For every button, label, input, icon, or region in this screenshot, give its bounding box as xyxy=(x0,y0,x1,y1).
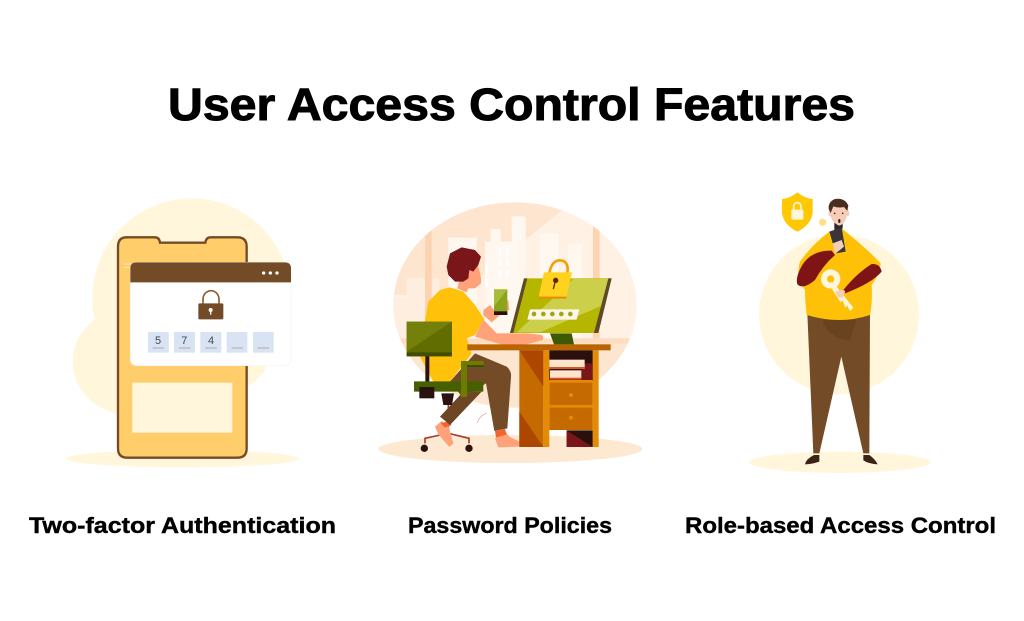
label: password policies: Password Policies xyxy=(408,513,612,538)
panel: role-based access control illustration xyxy=(749,192,931,473)
city skyline xyxy=(448,216,582,342)
desk xyxy=(467,344,611,447)
person: forearm and phone xyxy=(483,289,509,322)
monitor xyxy=(510,278,612,344)
person: neck and head xyxy=(828,199,849,231)
person: arm xyxy=(475,319,543,345)
ground shadow xyxy=(378,435,642,463)
person: shoes xyxy=(805,455,878,464)
authentication window xyxy=(130,262,291,366)
code boxes: 7 xyxy=(181,335,187,347)
label: two-factor authentication: Two-factor Authentication xyxy=(29,513,336,538)
person: right sleeve xyxy=(843,264,882,293)
window dots xyxy=(262,271,279,275)
background blob xyxy=(73,198,291,415)
books xyxy=(549,360,585,380)
thought bubble xyxy=(819,219,826,226)
window frames xyxy=(425,225,600,338)
ground shadow xyxy=(749,452,931,473)
person: legs xyxy=(807,313,870,453)
key icon xyxy=(821,269,853,311)
person: left sleeve xyxy=(797,251,835,286)
shield icon xyxy=(782,192,813,232)
person: feet xyxy=(435,421,522,447)
person: trousers xyxy=(450,353,511,431)
chair base xyxy=(421,405,473,452)
background circle xyxy=(759,234,919,394)
phone xyxy=(118,237,247,458)
label: role-based access control: Role-based Access Control xyxy=(685,513,996,538)
code boxes: 4 xyxy=(208,335,214,347)
panel: password policies illustration xyxy=(378,198,643,463)
person: torso xyxy=(420,287,484,382)
person: sweater xyxy=(798,228,881,320)
person: back leg xyxy=(440,392,482,425)
phone lower panel xyxy=(132,383,232,433)
drawers xyxy=(549,380,593,430)
padlock icon xyxy=(538,260,572,299)
phone menu lines xyxy=(124,264,132,268)
building windows xyxy=(485,248,509,286)
office window background xyxy=(393,202,636,408)
chair seat and back xyxy=(407,322,484,405)
title: User Access Control Features xyxy=(168,79,855,130)
ground shadow xyxy=(66,450,299,467)
person: head xyxy=(447,247,481,292)
panel: two-factor authentication illustration xyxy=(66,198,299,467)
padlock icon xyxy=(198,291,223,319)
movement marks xyxy=(477,413,487,423)
smartphone xyxy=(829,227,846,254)
person: socks xyxy=(441,422,507,438)
code boxes: 5 xyxy=(155,335,161,347)
password field xyxy=(527,309,579,320)
window header xyxy=(130,262,291,282)
code boxes xyxy=(148,332,274,353)
